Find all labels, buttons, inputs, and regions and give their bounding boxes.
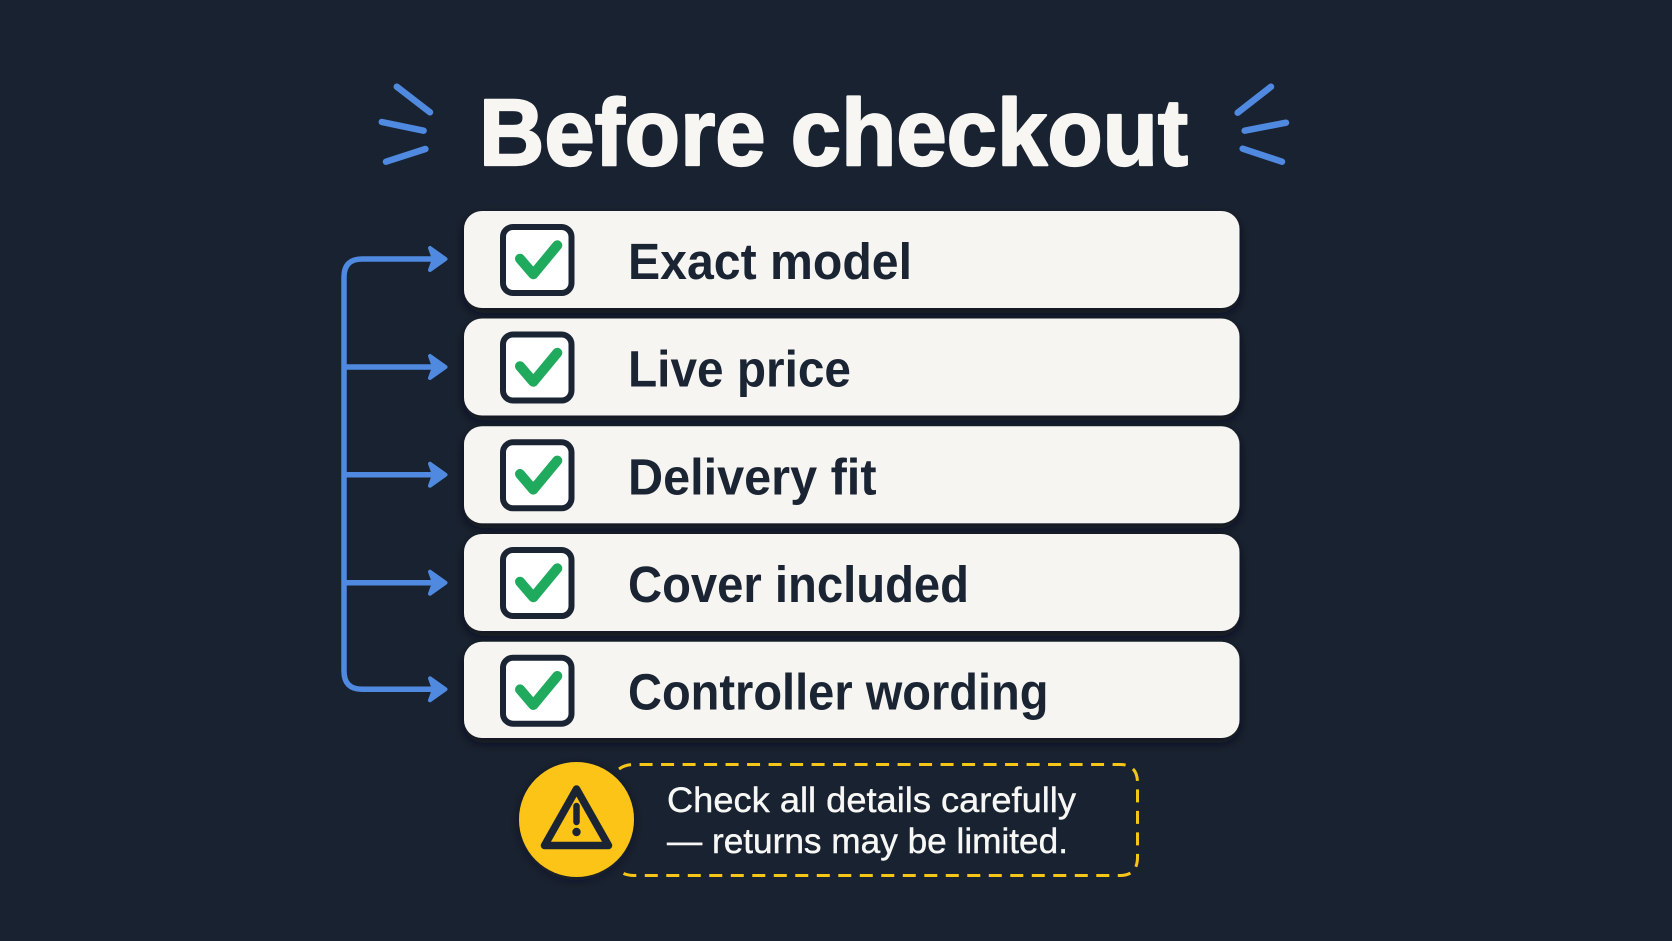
arrow trunk with top and bottom branches [344, 259, 432, 689]
arrows: bracket connecting to every row [344, 248, 446, 700]
icon: warning badge [519, 762, 634, 877]
icon: right spark lines [1238, 87, 1286, 162]
panel: row Cover included [464, 534, 1240, 631]
panel: row Exact model [464, 211, 1240, 308]
arrow branch: row 2 [344, 364, 432, 370]
callout text: Check all details carefully [667, 781, 1077, 820]
arrow branch: row 3 [344, 472, 432, 477]
callout dashed border [618, 764, 1138, 876]
title: Before checkout: Before checkout [479, 80, 1188, 186]
callout text [667, 781, 1077, 861]
icon: checkbox [503, 227, 572, 293]
label: Controller wording: Controller wording [628, 664, 1048, 721]
arrowheads [430, 248, 446, 700]
icon: checkbox [503, 334, 572, 400]
callout text: — returns may be limited. [667, 822, 1068, 861]
label: Delivery fit: Delivery fit [628, 448, 877, 505]
label: Cover included: Cover included [628, 556, 969, 613]
icon: checkbox [503, 658, 572, 724]
icon: left spark lines [382, 87, 430, 162]
icon: checkbox [503, 550, 572, 616]
icon: checkbox [503, 442, 572, 508]
panel: row Delivery fit [464, 426, 1240, 523]
panel: row Controller wording [464, 642, 1240, 738]
panel: row Live price [464, 318, 1240, 416]
label: Live price: Live price [628, 340, 851, 398]
callout: warning [519, 762, 1138, 877]
label: Exact model: Exact model [628, 233, 912, 290]
arrow branch: row 4 [344, 580, 432, 585]
